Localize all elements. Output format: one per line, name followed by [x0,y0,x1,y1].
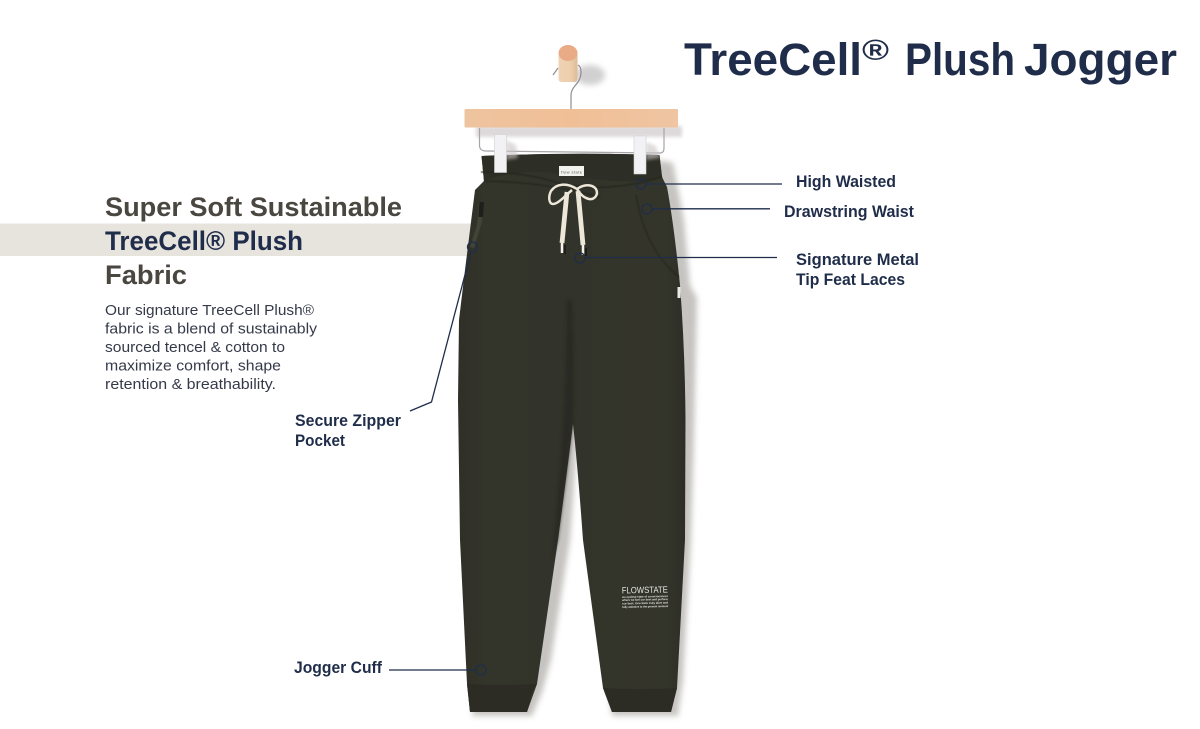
pants body [458,154,686,712]
waistband [482,154,662,181]
waistband seams [481,172,662,197]
flowstate print [621,585,669,609]
heading: fabric: Fabric [105,260,187,290]
callout: jogger cuff: Jogger Cuff [294,659,382,677]
hanger hook wire [553,65,581,110]
title: ® [862,35,889,67]
wooden bar [464,109,678,128]
title: TreeCell [684,34,862,85]
heading: fabric: Super Soft Sustainable [105,192,402,222]
hook shadow [575,65,605,85]
callout: secure zipper pocket [295,242,478,450]
heading: fabric: TreeCell® Plush [105,226,303,256]
flowstate print: An optimal state of consciousness [622,594,669,599]
fabric description text [105,302,318,393]
jogger pants [458,134,686,712]
jogger cuff right [603,688,677,712]
fabric description text: fabric is a blend of sustainably [105,320,318,338]
background band [0,224,472,256]
fold shading [552,300,574,560]
callout: jogger cuff [294,659,486,677]
garment shadow [472,160,697,716]
side tag [678,287,680,298]
clip right [634,136,660,174]
callout: signature metal tip laces: Signature Metal [796,251,919,269]
title: Jogger [1024,34,1177,85]
callout: secure zipper pocket: Pocket [295,432,345,450]
callout: signature metal tip laces [575,251,919,289]
brand tag [559,166,584,176]
flowstate print: fully attentive to the present moment [622,604,668,609]
callout: secure zipper pocket: Secure Zipper [295,412,402,430]
right pocket seam [636,195,679,277]
fabric description text: retention & breathability. [105,376,276,393]
fabric description text: sourced tencel & cotton to [105,339,285,356]
callout: drawstring waist [642,203,914,221]
callout: high waisted [636,173,896,191]
zipper pocket [470,202,484,248]
drawstring [549,185,597,256]
callout: signature metal tip laces: Tip Feat Laces [796,271,905,289]
flowstate print: where we feel our best and perform [621,597,669,602]
flowstate print: our best. One feels truly alive and [622,601,669,605]
title [684,34,1177,85]
title: Plush [905,34,1015,85]
clip left [494,134,518,172]
heading: fabric [105,192,402,290]
hanger [464,45,682,153]
bar shadow [476,126,682,137]
brand tag: flow state [561,170,583,174]
fabric description text: maximize comfort, shape [105,358,281,374]
callout: high waisted: High Waisted [796,173,896,191]
jogger cuff left [467,684,537,712]
clip wire [480,128,664,153]
callout: drawstring waist: Drawstring Waist [784,203,914,221]
flowstate print: FLOWSTATE [622,585,668,595]
wooden peg [558,45,578,82]
fabric description text: Our signature TreeCell Plush® [105,302,314,319]
